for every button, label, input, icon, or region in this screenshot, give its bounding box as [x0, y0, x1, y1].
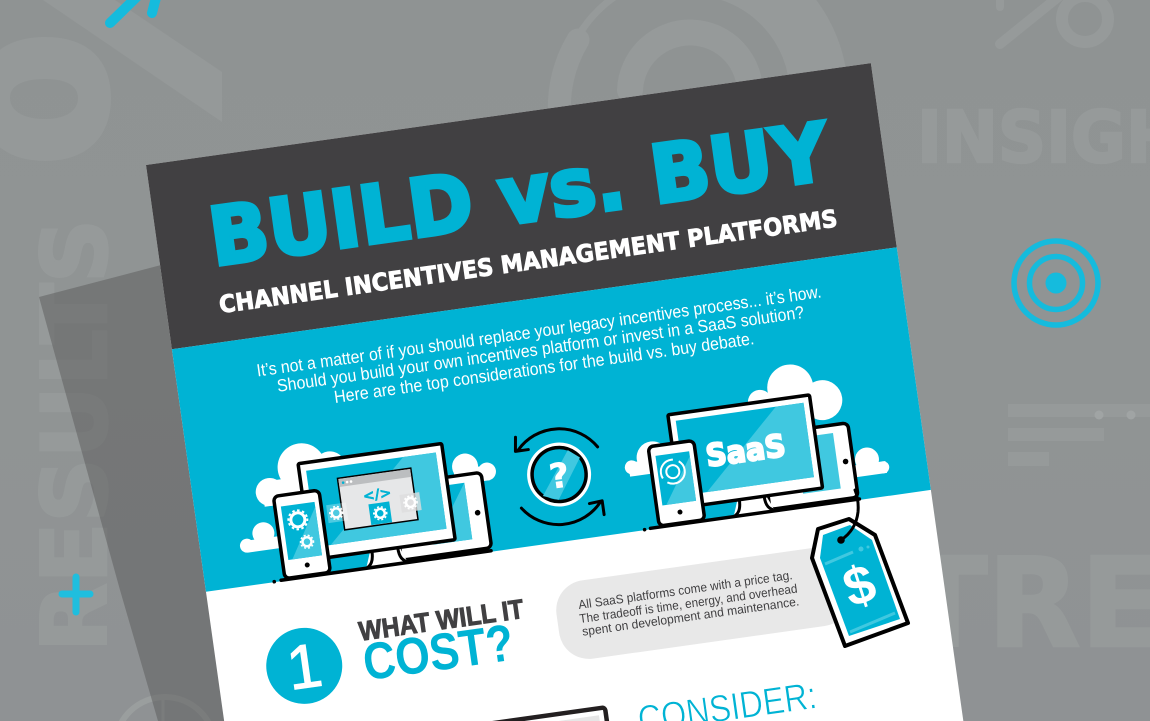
title: BUILD vs. BUY [203, 105, 835, 284]
clouds [227, 417, 502, 554]
number badge [261, 623, 347, 709]
SaaS label: SaaS [704, 428, 788, 475]
illustration: SaaS devices [614, 353, 893, 533]
icon: question mark with cycle arrows: ? [547, 455, 572, 498]
code window [323, 467, 423, 532]
shadow sheet behind page [39, 264, 262, 721]
subtitle: CHANNEL INCENTIVES MANAGEMENT PLATFORMS [217, 204, 839, 319]
stand and base line [270, 535, 491, 584]
header band [146, 63, 897, 349]
background ring graphic, top centre [559, 0, 819, 120]
background percent sign, top right [1000, 0, 1108, 44]
icon: arrow, top left [110, 0, 158, 23]
icon: price tag [812, 490, 908, 646]
icon: question mark with cycle arrows [511, 423, 608, 530]
stand and base line [641, 483, 860, 532]
tablet [760, 423, 858, 510]
background word: RESULTS: RESULTS [23, 219, 128, 652]
phone [648, 440, 705, 526]
code window: </> [362, 485, 392, 505]
tablet [391, 472, 492, 560]
page white base [146, 63, 977, 721]
monitor [298, 444, 455, 560]
phone [273, 490, 330, 579]
icon: target [1014, 241, 1098, 325]
background ring, bottom left [115, 697, 215, 721]
background percent sign, left [0, 0, 222, 161]
intro text: Should you build your own incentives platform or invest in a SaaS solution? [276, 302, 805, 396]
illustration: build devices [227, 417, 507, 588]
clouds [614, 353, 890, 509]
section 1: cost [260, 544, 880, 721]
intro text [255, 281, 828, 417]
description pill [552, 544, 854, 663]
panel: tilted infographic page [146, 63, 977, 721]
laptop icon, cropped [428, 707, 623, 721]
description pill: The tradeoff is time, energy, and overhead [578, 582, 798, 626]
blue intro band [172, 247, 931, 593]
monitor [668, 395, 823, 508]
description pill: spent on development and maintenance. [581, 594, 800, 639]
description pill: All SaaS platforms come with a price tag. [577, 568, 793, 612]
number badge: 1 [283, 631, 326, 704]
intro text: It’s not a matter of if you should replace your legacy incentives process... it’s how. [255, 281, 823, 380]
background text lines icon [1008, 404, 1150, 466]
icon: price tag: $ [836, 553, 883, 619]
heading: what will it: WHAT WILL IT [357, 594, 526, 647]
heading: cost: COST? [359, 614, 517, 692]
intro text: Here are the top considerations for the build vs. buy debate. [333, 328, 755, 407]
icon: plus sign [62, 577, 90, 612]
